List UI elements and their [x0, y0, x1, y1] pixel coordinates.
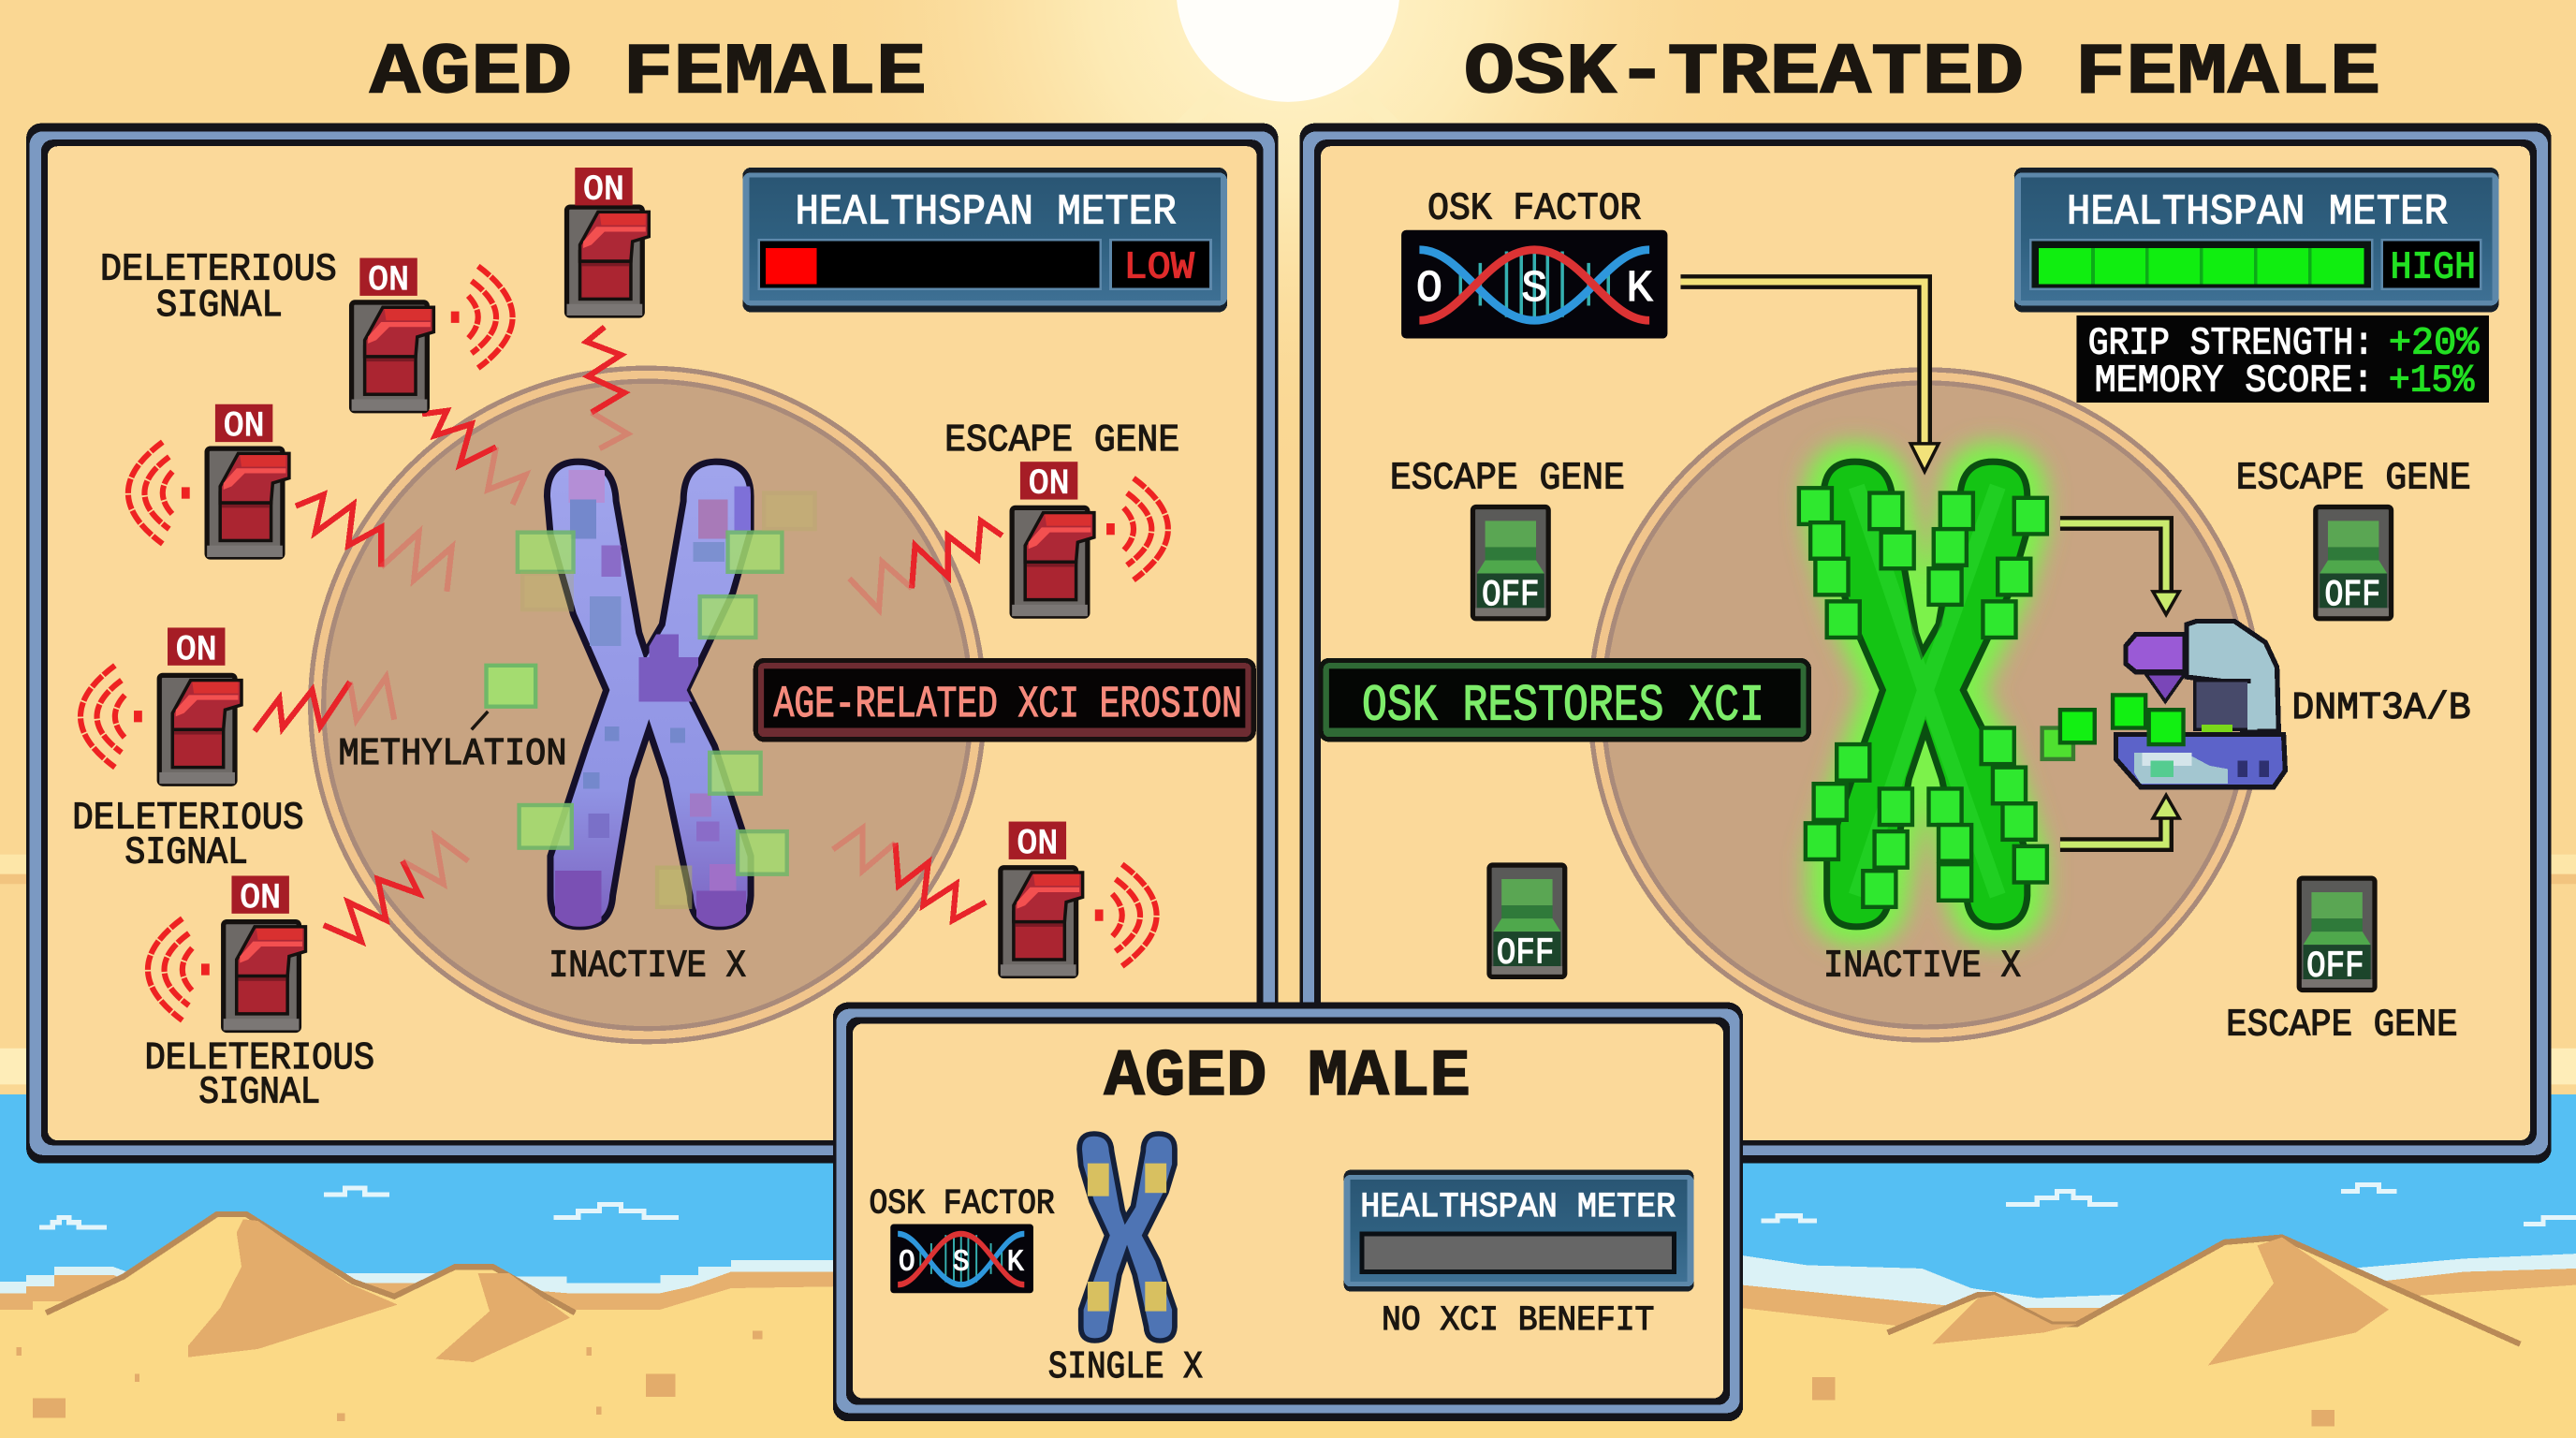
banner: OSK restores XCI — [1321, 661, 1808, 740]
stats box: grip and memory: GRIP STRENGTH: — [2088, 322, 2374, 365]
switch: lower right ON: ON — [1017, 825, 1058, 864]
label: OSK factor: OSK FACTOR — [1427, 187, 1641, 230]
OSK DNA helix box small: S — [953, 1247, 970, 1280]
label: deleterious signal 3 — [144, 1037, 374, 1115]
switch: top ON: ON — [583, 170, 624, 210]
label: DNMT3A/B: DNMT3A/B — [2291, 687, 2471, 730]
label: no XCI benefit: NO XCI BENEFIT — [1382, 1301, 1654, 1341]
switch: escape gene OFF left — [1472, 506, 1548, 619]
healthspan meter: empty — [1344, 1170, 1694, 1292]
label: single X: SINGLE X — [1048, 1346, 1203, 1389]
OSK DNA helix box small: K — [1007, 1247, 1023, 1280]
label: escape gene left: ESCAPE GENE — [1390, 457, 1625, 500]
switch: lower right ON — [1001, 822, 1157, 976]
switch: ON with waves, left — [128, 404, 289, 557]
switch: OFF lower right — [2299, 878, 2375, 990]
panel: OSK-treated female — [1299, 124, 2552, 1164]
label: inactive X: INACTIVE X — [549, 946, 746, 989]
label: escape gene bottom: ESCAPE GENE — [2226, 1005, 2458, 1048]
switch: OFF lower right: OFF — [2306, 946, 2364, 988]
label: deleterious signal 2 — [72, 798, 304, 874]
healthspan meter: low: HEALTHSPAN METER — [795, 188, 1177, 237]
label: deleterious signal 1: DELETERIOUS — [100, 248, 337, 291]
methylation marks restored — [1799, 488, 2047, 907]
switch: OFF lower left: OFF — [1497, 932, 1554, 974]
switch: ON with waves, mid left: ON — [176, 631, 217, 670]
dune: left large — [46, 1214, 575, 1364]
healthspan meter: empty: HEALTHSPAN METER — [1360, 1188, 1676, 1227]
switch: top ON — [567, 168, 649, 315]
switch: OFF lower left — [1489, 865, 1565, 976]
switch: escape gene OFF right — [2316, 506, 2392, 619]
chromosome: single X — [1079, 1134, 1175, 1341]
healthspan meter: low: LOW — [1123, 247, 1195, 290]
enzyme: DNMT3A/B — [2116, 621, 2285, 787]
switch: ON with waves, upper left — [352, 258, 513, 411]
banner: age-related XCI erosion — [755, 661, 1253, 740]
stats box: grip and memory: +20% — [2389, 322, 2480, 365]
switch: ON with waves, lower left — [148, 875, 305, 1030]
healthspan meter: low — [742, 168, 1227, 312]
OSK DNA helix box small — [890, 1225, 1033, 1293]
banner: OSK restores XCI: OSK RESTORES XCI — [1362, 679, 1764, 736]
switch: escape gene OFF left: OFF — [1482, 575, 1540, 616]
label: escape gene right: ESCAPE GENE — [2236, 457, 2471, 500]
OSK DNA helix box: S — [1521, 265, 1547, 315]
label: OSK factor: OSK FACTOR — [869, 1184, 1055, 1224]
panel: aged male — [833, 1003, 1743, 1421]
background: desert sky — [0, 0, 2576, 1101]
switch: ON with waves, left: ON — [224, 407, 265, 447]
arrow: chromosome to enzyme upper — [2060, 523, 2179, 614]
heading: aged male: AGED MALE — [1104, 1041, 1471, 1115]
switch: ON with waves, mid left — [80, 627, 242, 784]
chromosome: inactive X restored — [1799, 462, 2047, 927]
label: deleterious signal 2: SIGNAL — [124, 831, 248, 874]
label: deleterious signal 1 — [100, 248, 337, 328]
signal zigzags — [255, 327, 1003, 942]
panel: aged female — [26, 124, 1278, 1164]
label: deleterious signal 1: SIGNAL — [156, 285, 283, 328]
methyl groups moving to chromosome — [2042, 695, 2184, 759]
label: escape gene: ESCAPE GENE — [944, 419, 1179, 462]
switch: escape gene OFF right: OFF — [2324, 575, 2380, 616]
stats box: grip and memory — [2076, 315, 2489, 404]
OSK DNA helix box — [1401, 230, 1667, 339]
sun — [1134, 0, 1442, 165]
OSK DNA helix box: O — [1416, 265, 1442, 315]
switch: escape gene ON — [1012, 462, 1168, 616]
label: deleterious signal 3: SIGNAL — [198, 1072, 320, 1115]
heading: OSK-treated female: OSK-TREATED FEMALE — [1464, 33, 2380, 114]
background: ocean and beach — [0, 1094, 2576, 1438]
nucleus: aged female — [311, 368, 984, 1042]
switch: escape gene ON: ON — [1029, 465, 1070, 505]
banner: age-related XCI erosion: AGE-RELATED XCI EROSION — [774, 681, 1242, 730]
switch: ON with waves, upper left: ON — [368, 261, 409, 301]
methylation marks fading — [487, 493, 815, 907]
chromosome: inactive X eroded — [547, 462, 751, 927]
healthspan meter: high: HEALTHSPAN METER — [2067, 188, 2448, 237]
stats box: grip and memory: +15% — [2389, 360, 2475, 404]
heading: aged female: AGED FEMALE — [370, 33, 927, 114]
dune: right large — [1888, 1238, 2520, 1380]
label: methylation: METHYLATION — [339, 733, 567, 776]
label: methylation — [339, 712, 567, 776]
arrow: chromosome to enzyme lower — [2060, 795, 2179, 844]
label: deleterious signal 3: DELETERIOUS — [144, 1037, 374, 1080]
arrow: OSK factor to chromosome — [1680, 282, 1939, 472]
label: deleterious signal 2: DELETERIOUS — [72, 798, 304, 841]
healthspan meter: high — [2014, 168, 2499, 312]
OSK DNA helix box: K — [1627, 265, 1653, 315]
nucleus: OSK-treated female — [1590, 370, 2261, 1040]
switch: ON with waves, lower left: ON — [240, 879, 281, 918]
stats box: grip and memory: MEMORY SCORE: — [2095, 360, 2374, 404]
healthspan meter: high: HIGH — [2391, 247, 2476, 290]
label: inactive X: INACTIVE X — [1823, 946, 2021, 989]
OSK DNA helix box small: O — [899, 1247, 915, 1280]
